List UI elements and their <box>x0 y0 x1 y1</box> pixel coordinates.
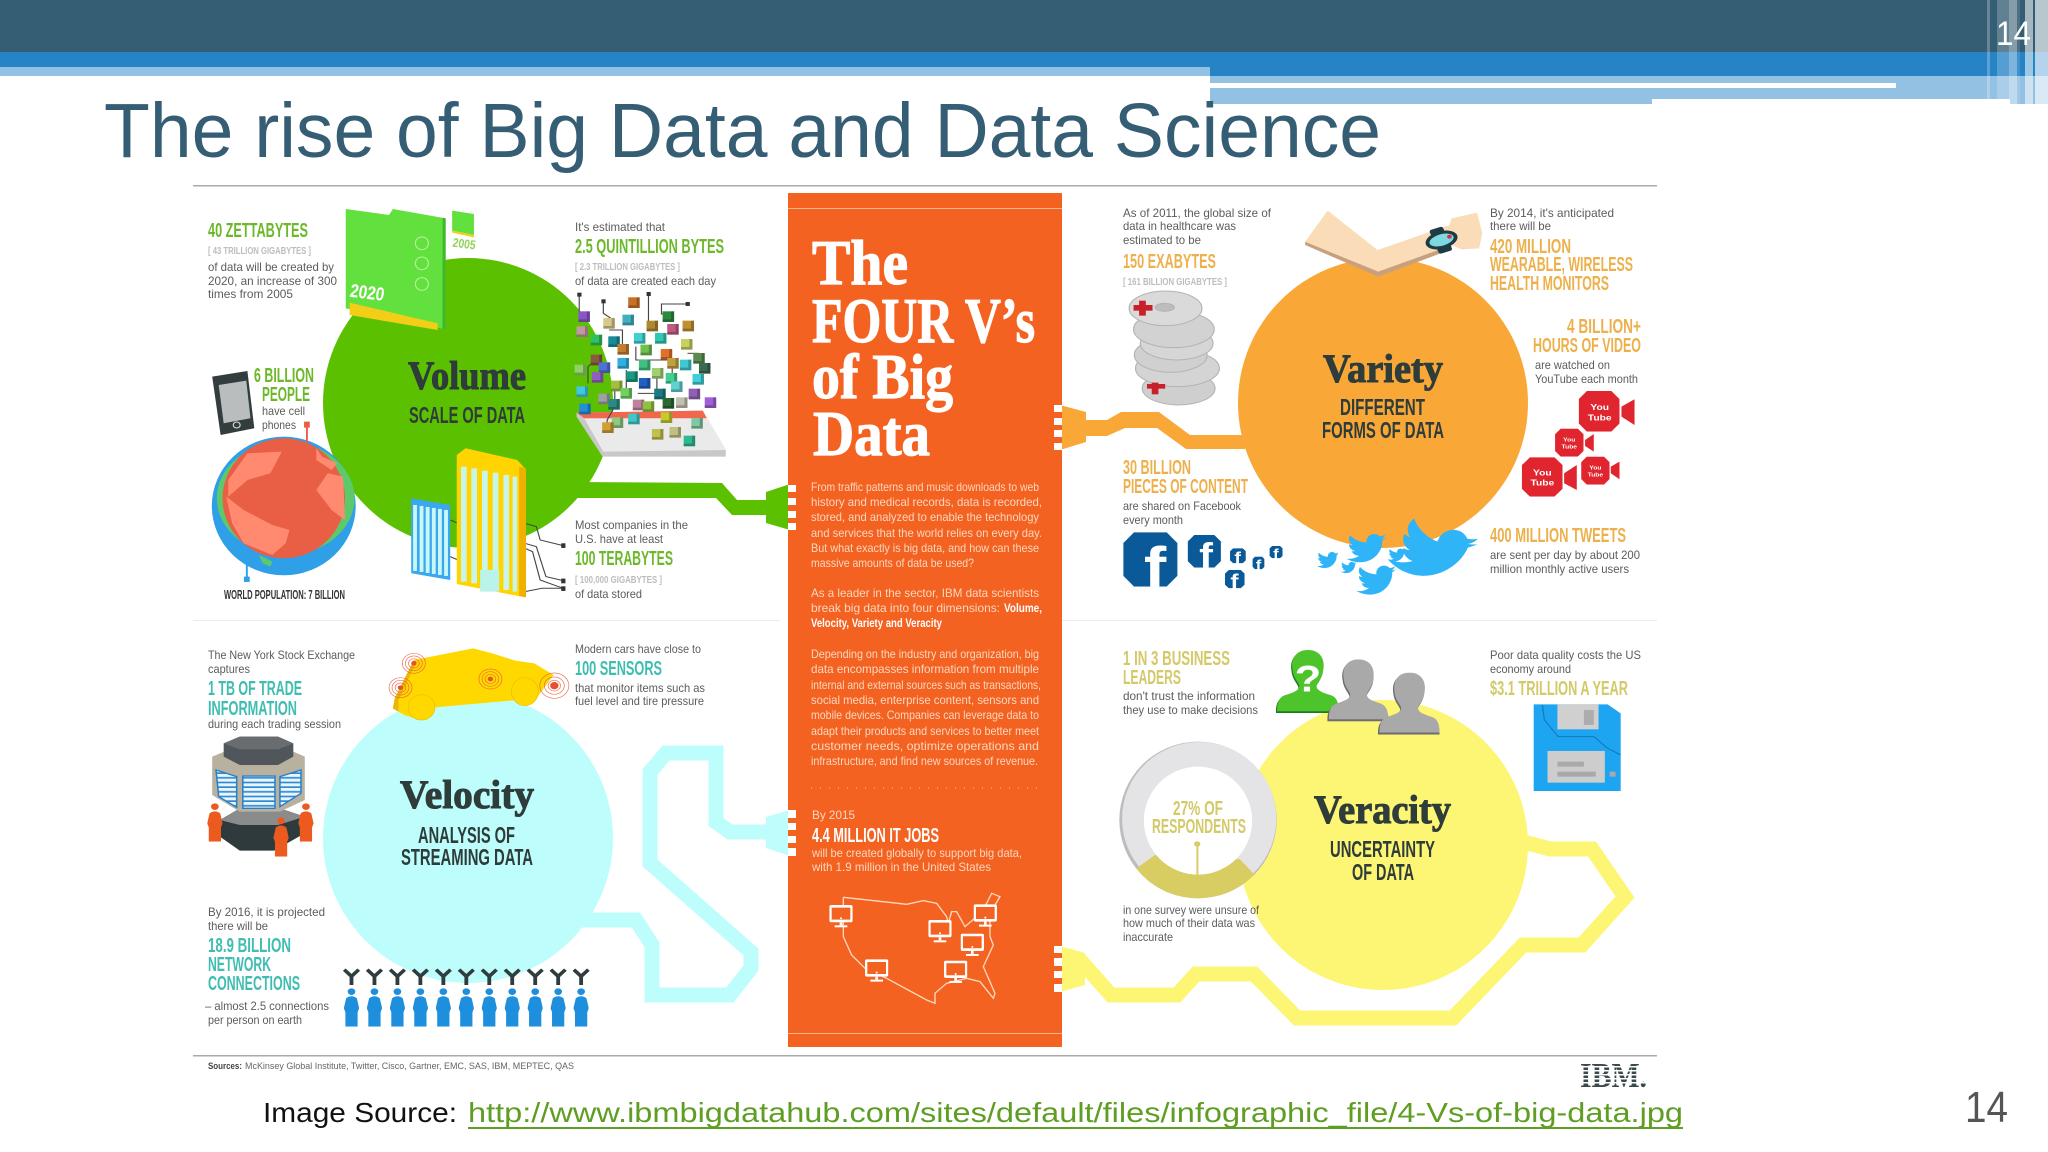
veracity circle <box>1238 700 1528 990</box>
text: 420 million: WEARABLE, WIRELESS <box>1490 254 1633 276</box>
panel heading <box>812 227 1035 469</box>
volume title: SCALE OF DATA <box>409 402 525 428</box>
text: 100 sensors <box>575 642 705 708</box>
icon: youtube cameras: You <box>1589 465 1602 471</box>
text: 1 TB of trade <box>208 648 355 731</box>
intro paragraphs: social media, enterprise content, sensors and <box>811 693 1039 707</box>
icon: facebook logos: f <box>1144 536 1167 599</box>
icon: facebook logos: f <box>1230 569 1239 593</box>
image source caption: http://www.ibmbigdatahub.com/sites/default/files/infographic_file/4-Vs-of-big-data.jpg <box>468 1097 1683 1128</box>
intro paragraphs: massive amounts of data be used? <box>811 556 974 570</box>
slide header bands <box>0 0 2048 104</box>
text: 1 in 3 business leaders: they use to make decisions <box>1123 703 1258 717</box>
text: 100 terabytes <box>575 518 688 601</box>
text: 1 TB of trade: during each trading session <box>208 717 341 731</box>
text: 18.9 billion: By 2016, it is projected <box>208 905 325 919</box>
connector notches <box>788 405 1062 992</box>
text: 420 million: 420 MILLION <box>1490 236 1571 258</box>
text: 30 billion pieces: 30 BILLION <box>1123 457 1191 479</box>
text: 4 billion hours: HOURS OF VIDEO <box>1533 335 1641 357</box>
title: The rise of Big Data and Data Science <box>104 88 1381 174</box>
donut chart: 27 percent <box>1119 742 1277 898</box>
sources line: McKinsey Global Institute, Twitter, Cisco, Gartner, EMC, SAS, IBM, MEPTEC, QAS <box>245 1061 574 1072</box>
bottom slide number: 14 <box>1965 1083 2008 1132</box>
text: 40 zettabytes: of data will be created by <box>208 260 334 274</box>
top slide number: 14 <box>1996 15 2031 53</box>
text: 2.5 quintillion bytes: of data are created each day <box>575 274 716 288</box>
text: 150 exabytes: [ 161 BILLION GIGABYTES ] <box>1123 276 1227 288</box>
intro paragraphs: adapt their products and services to better meet <box>811 724 1040 738</box>
icon: youtube cameras: Tube <box>1530 478 1554 488</box>
text: 27 percent of respondents <box>1152 798 1246 838</box>
text: $3.1 trillion <box>1490 648 1641 700</box>
variety title: FORMS OF DATA <box>1322 417 1444 443</box>
text: 27 percent of respondents: RESPONDENTS <box>1152 816 1246 838</box>
panel heading: The <box>812 227 908 298</box>
text: 18.9 billion: CONNECTIONS <box>208 973 300 995</box>
text: 150 exabytes <box>1123 206 1272 288</box>
icon: facebook logos: f <box>1234 548 1242 567</box>
text: 30 billion pieces: every month <box>1123 513 1183 527</box>
text: 100 terabytes: 100 TERABYTES <box>575 548 673 570</box>
text: 30 billion pieces <box>1123 457 1248 527</box>
icon: youtube cameras: Tube <box>1562 444 1578 450</box>
icon: stacked disks <box>1129 291 1219 405</box>
text: 40 zettabytes: 40 ZETTABYTES <box>208 220 308 242</box>
image source caption: Image Source: <box>263 1097 457 1128</box>
text: 1 TB of trade: 1 TB OF TRADE <box>208 678 302 700</box>
variety title: DIFFERENT <box>1340 394 1425 420</box>
volume connector <box>570 482 790 530</box>
intro paragraphs: From traffic patterns and music downloads to web <box>811 480 1039 494</box>
panel heading: of Big <box>812 341 953 412</box>
intro paragraphs: infrastructure, and find new sources of revenue. <box>811 754 1038 768</box>
text: 27 percent of respondents: 27% OF <box>1173 798 1223 820</box>
icon: facebook logos: f <box>1199 537 1213 576</box>
icon: youtube cameras: You <box>1533 468 1552 478</box>
panel: four v's center column <box>788 193 1062 1047</box>
text: 150 exabytes: data in healthcare was <box>1123 219 1236 233</box>
icon: facebook logos: f <box>1273 546 1280 562</box>
text: world population: WORLD POPULATION: 7 BILLION <box>224 588 345 602</box>
icon: stock exchange server <box>207 737 314 857</box>
velocity connector <box>580 753 790 995</box>
text: survey result <box>1123 903 1260 944</box>
text: 1 in 3 business leaders: 1 IN 3 BUSINESS <box>1123 648 1230 670</box>
text: 400 million tweets: million monthly active users <box>1490 562 1629 576</box>
text: 400 million tweets: are sent per day by about 200 <box>1490 548 1640 562</box>
text: 18.9 billion: 18.9 BILLION <box>208 935 291 957</box>
intro paragraphs: and services that the world relies on every day. <box>811 526 1042 540</box>
text: 2.5 quintillion bytes: It's estimated that <box>575 220 666 234</box>
icon: memory cards: 2005 <box>452 236 477 252</box>
icon: facebook logos: f <box>1256 557 1262 573</box>
panel: variety <box>1060 206 1641 599</box>
panel heading: FOUR V’s <box>812 285 1035 356</box>
text: 1 in 3 business leaders: LEADERS <box>1123 667 1181 689</box>
text: 400 million tweets: 400 MILLION TWEETS <box>1490 525 1626 547</box>
text: 2.5 quintillion bytes: 2.5 QUINTILLION BYTES <box>575 236 724 258</box>
intro paragraphs: Volume, <box>1004 601 1042 615</box>
text: 30 billion pieces: PIECES OF CONTENT <box>1123 476 1248 498</box>
text: 6 billion people <box>254 365 314 432</box>
text: 2.5 quintillion bytes: [ 2.3 TRILLION GIGABYTES ] <box>575 261 680 273</box>
icon: memory cards: 2020 <box>348 281 386 305</box>
intro paragraphs: data encompasses information from multiple <box>811 662 1039 676</box>
text: 1 TB of trade: The New York Stock Exchange <box>208 648 355 662</box>
text: 6 billion people: 6 BILLION <box>254 365 314 387</box>
icon: twitter birds <box>1317 514 1481 595</box>
text: 150 exabytes: As of 2011, the global size of <box>1123 206 1272 220</box>
text: 420 million: By 2014, it's anticipated <box>1490 206 1614 220</box>
text: 4 billion hours <box>1533 316 1641 386</box>
text: 40 zettabytes: [ 43 TRILLION GIGABYTES ] <box>208 245 311 257</box>
text: 100 terabytes: [ 100,000 GIGABYTES ] <box>575 574 662 586</box>
text: 4.4 million IT jobs: with 1.9 million in the United States <box>811 860 991 874</box>
text: 420 million: there will be <box>1490 219 1551 233</box>
icon: youtube cameras: You <box>1563 437 1576 443</box>
text: 100 sensors: that monitor items such as <box>575 681 705 695</box>
text: survey result: how much of their data was <box>1123 916 1255 930</box>
panel: veracity <box>1060 648 1641 1018</box>
text: 40 zettabytes: times from 2005 <box>208 287 293 301</box>
text: 18.9 billion <box>205 905 329 1027</box>
text: 6 billion people: phones <box>262 418 296 432</box>
text: 40 zettabytes <box>208 220 337 301</box>
velocity title: Velocity <box>400 772 534 817</box>
text: survey result: inaccurate <box>1123 930 1173 944</box>
text: 18.9 billion: NETWORK <box>208 954 271 976</box>
text: $3.1 trillion: Poor data quality costs the US <box>1490 648 1641 662</box>
text: 420 million: HEALTH MONITORS <box>1490 273 1609 295</box>
text: 100 terabytes: Most companies in the <box>575 518 688 532</box>
text: 4 billion hours: 4 BILLION+ <box>1567 316 1641 338</box>
icon: people silhouettes: ? <box>1295 659 1321 700</box>
text: 40 zettabytes: 2020, an increase of 300 <box>208 274 337 288</box>
intro paragraphs: break big data into four dimensions: <box>811 601 1000 615</box>
text: survey result: in one survey were unsure of <box>1123 903 1260 917</box>
velocity title <box>400 772 534 870</box>
icon: youtube cameras: You <box>1590 403 1609 413</box>
variety title <box>1322 346 1444 443</box>
variety connector <box>1060 405 1245 450</box>
icon: data cubes <box>575 292 726 457</box>
variety circle <box>1238 258 1528 548</box>
text: 400 million tweets <box>1490 525 1640 576</box>
text: 4.4 million IT jobs: By 2015 <box>812 808 855 822</box>
text: 1 TB of trade: INFORMATION <box>208 698 297 720</box>
text: 420 million <box>1490 206 1633 295</box>
icon: youtube cameras <box>1522 391 1635 497</box>
text: 18.9 billion: – almost 2.5 connections <box>205 999 329 1013</box>
text: $3.1 trillion: economy around <box>1490 662 1571 676</box>
text: 6 billion people: have cell <box>262 404 305 418</box>
velocity title: STREAMING DATA <box>401 844 533 870</box>
volume title: Volume <box>408 353 526 398</box>
volume title <box>408 353 526 428</box>
intro paragraphs: internal and external sources such as transactions, <box>811 678 1041 692</box>
veracity title: UNCERTAINTY <box>1330 836 1435 862</box>
text: 100 sensors: fuel level and tire pressure <box>575 694 704 708</box>
icon: IBM logo: IBM. <box>1580 1056 1647 1095</box>
intro paragraphs: mobile devices. Companies can leverage data to <box>811 708 1039 722</box>
panel heading: Data <box>813 398 930 469</box>
intro paragraphs: But what exactly is big data, and how can these <box>811 541 1039 555</box>
text: 1 in 3 business leaders: don't trust the information <box>1123 689 1255 703</box>
text: 18.9 billion: per person on earth <box>208 1013 302 1027</box>
intro paragraphs: history and medical records, data is recorded, <box>811 495 1042 509</box>
icon: youtube cameras: Tube <box>1588 413 1612 423</box>
icon: office buildings <box>411 448 565 597</box>
sources line: Sources: <box>208 1061 242 1072</box>
text: 150 exabytes: 150 EXABYTES <box>1123 251 1216 273</box>
text: 100 terabytes: of data stored <box>575 587 642 601</box>
icon: people silhouettes <box>1276 650 1440 735</box>
text: 2.5 quintillion bytes <box>575 220 724 288</box>
volume circle <box>323 258 613 548</box>
variety title: Variety <box>1323 346 1443 391</box>
velocity title: ANALYSIS OF <box>418 822 515 848</box>
text: 1 TB of trade: captures <box>208 662 250 676</box>
intro paragraphs <box>811 480 1042 768</box>
text: 100 sensors: Modern cars have close to <box>575 642 701 656</box>
text: 100 terabytes: U.S. have at least <box>575 532 664 546</box>
veracity connector <box>1060 841 1625 1018</box>
text: 100 sensors: 100 SENSORS <box>575 658 662 680</box>
intro paragraphs: Depending on the industry and organization, big <box>811 647 1039 661</box>
veracity title: Veracity <box>1314 787 1451 832</box>
icon: youtube cameras: Tube <box>1588 472 1604 478</box>
intro paragraphs: customer needs, optimize operations and <box>811 739 1039 753</box>
veracity title <box>1314 787 1451 885</box>
text: 4.4 million IT jobs: will be created globally to support big data, <box>811 846 1022 860</box>
text: 150 exabytes: estimated to be <box>1123 233 1201 247</box>
text: 6 billion people: PEOPLE <box>262 384 310 406</box>
veracity title: OF DATA <box>1352 859 1414 885</box>
text: 30 billion pieces: are shared on Facebook <box>1123 499 1242 513</box>
icon: globe <box>212 422 356 582</box>
velocity circle <box>323 693 613 983</box>
icon: car with sensors <box>389 648 569 720</box>
text: 1 in 3 business leaders <box>1123 648 1258 717</box>
icon: memory cards <box>346 209 477 330</box>
panel: velocity <box>205 642 790 1027</box>
text: 4 billion hours: are watched on <box>1535 358 1610 372</box>
text: 18.9 billion: there will be <box>208 919 268 933</box>
map: united states with monitors <box>829 893 1000 1003</box>
icon: arm with wearable <box>1305 211 1482 277</box>
icon: floppy disk <box>1534 704 1621 791</box>
intro paragraphs: As a leader in the sector, IBM data scientists <box>811 586 1039 600</box>
text: $3.1 trillion: $3.1 TRILLION A YEAR <box>1490 678 1628 700</box>
text: 4.4 million IT jobs: 4.4 MILLION IT JOBS <box>812 825 939 847</box>
intro paragraphs: Velocity, Variety and Veracity <box>811 616 942 630</box>
icon: network connections people <box>344 970 589 1027</box>
panel: volume <box>208 209 790 602</box>
intro paragraphs: stored, and analyzed to enable the technology <box>811 510 1039 524</box>
icon: phone <box>212 371 254 435</box>
text: 4 billion hours: YouTube each month <box>1535 372 1638 386</box>
text: 4.4 million IT jobs <box>811 808 1022 874</box>
icon: facebook logos <box>1123 532 1283 599</box>
